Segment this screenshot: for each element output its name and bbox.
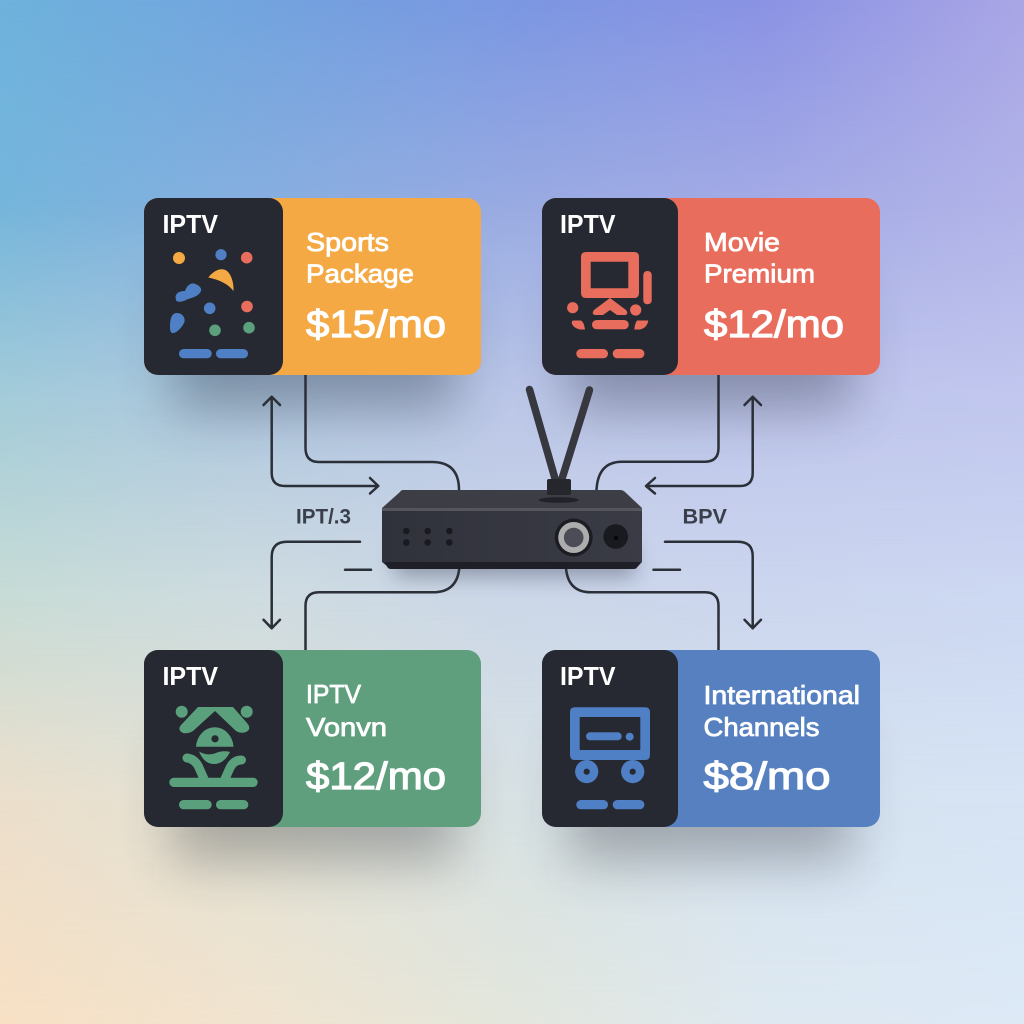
- connector: sports package to box: [306, 375, 459, 490]
- package name: IPTV: [306, 679, 362, 709]
- card background: [144, 650, 481, 827]
- antenna base: [547, 479, 571, 495]
- brand label: IPTV: [560, 661, 616, 691]
- connector: short dash left: [345, 568, 371, 571]
- icon: movie screen: [567, 252, 652, 358]
- small round port: [603, 524, 628, 549]
- brand label: IPTV: [162, 661, 219, 691]
- panel: iptv vonvn: [144, 650, 481, 827]
- card background: [542, 198, 880, 375]
- package name: Sports: [306, 227, 389, 257]
- package name line 2: Premium: [704, 258, 815, 288]
- box bottom strip: [384, 562, 641, 569]
- dark icon panel: [542, 198, 678, 375]
- connector: box to international channels: [566, 568, 718, 650]
- connector: box to iptv package: [306, 568, 459, 650]
- package name line 2: Vonvn: [306, 712, 387, 742]
- icon: tv set: [570, 707, 650, 809]
- package name: Movie: [704, 227, 780, 257]
- dark icon panel: [542, 650, 678, 827]
- label: BPV: BPV: [682, 505, 727, 528]
- price: $15/mo: [306, 304, 446, 346]
- arrow: box to movie premium: [646, 397, 761, 494]
- large round port: [555, 518, 593, 556]
- icon: sports: [170, 249, 255, 358]
- package name line 2: Channels: [704, 712, 820, 742]
- label: IPT/.3: IPT/.3: [296, 505, 351, 528]
- set-top box device: [382, 390, 642, 569]
- price: $12/mo: [306, 756, 446, 798]
- price: $12/mo: [704, 304, 844, 346]
- card background: [144, 198, 481, 375]
- box top edge highlight: [382, 508, 642, 511]
- dark icon panel: [144, 198, 283, 375]
- antenna base disc: [539, 497, 579, 503]
- antennas: [530, 390, 590, 482]
- box body top: [382, 490, 642, 511]
- panel: movie premium: [542, 198, 880, 375]
- arrow: box to international channels: [665, 542, 761, 628]
- icon: shrine: [169, 706, 258, 809]
- indicator lights: [403, 528, 453, 546]
- package name line 2: Package: [306, 258, 414, 288]
- card background: [542, 650, 880, 827]
- arrow: box to sports package: [264, 397, 378, 494]
- dark icon panel: [144, 650, 283, 827]
- panel: sports package: [144, 198, 481, 375]
- box front: [382, 510, 642, 568]
- arrow: box to iptv package: [264, 542, 360, 628]
- brand label: IPTV: [560, 209, 616, 239]
- price: $8/mo: [704, 756, 830, 798]
- connector: movie premium to box: [596, 375, 718, 490]
- package name: International: [704, 680, 860, 710]
- connector: short dash right: [654, 568, 680, 571]
- panel: international channels: [542, 650, 880, 827]
- brand label: IPTV: [162, 209, 219, 239]
